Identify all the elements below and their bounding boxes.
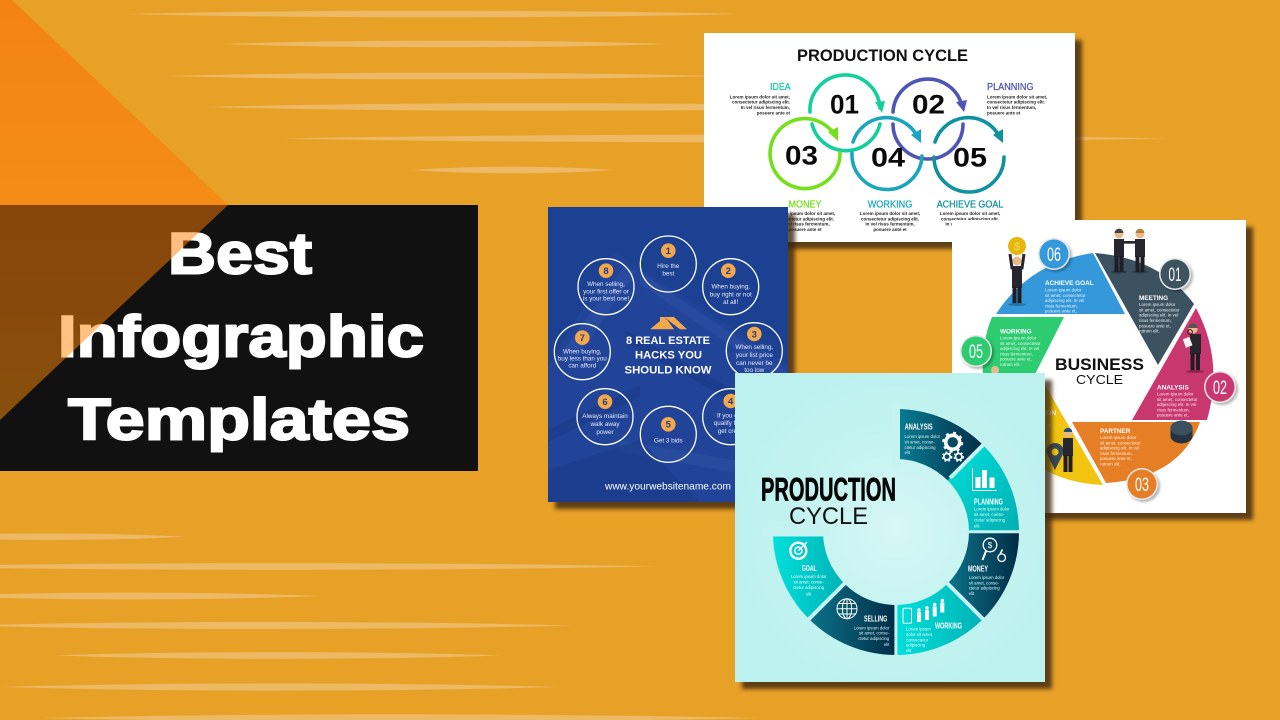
hack 7: buy less than you: [558, 356, 607, 363]
text: working: adipiscing: [906, 643, 926, 648]
centre heading: [1055, 355, 1144, 387]
donut heading: PRODUCTION: [761, 472, 896, 508]
hack 3: When selling,: [735, 344, 773, 351]
title panel: [0, 205, 478, 471]
label: money: posuere ante et: [788, 227, 822, 232]
ring numbers: 02: [912, 89, 945, 119]
hack 3: too low: [744, 367, 765, 374]
segment: meeting: Lorem ipsum dolor: [1139, 302, 1176, 307]
label: working: Lorem ipsum dolor sit amet,: [860, 211, 920, 216]
hack 2: [703, 259, 759, 315]
text: analysis: elit: [904, 450, 911, 455]
figure: partial worker: [990, 366, 1000, 379]
badge 03: 03: [1135, 475, 1149, 496]
hack 1: Hire the: [657, 263, 680, 270]
hack 7: When buying,: [563, 348, 602, 355]
hack 3: can never be: [736, 360, 773, 367]
segment: analysis: ANALYSIS: [1157, 384, 1189, 392]
text: analysis: ctetur adipiscing: [904, 445, 936, 450]
hack 8: your first offer or: [583, 288, 629, 295]
text: working: WORKING: [935, 620, 962, 630]
hack 8: When selling,: [587, 281, 625, 288]
text: goal: [791, 563, 827, 596]
segment: meeting: posuere ante et,: [1139, 323, 1171, 328]
label: money: [775, 200, 835, 232]
hack 4: 4: [728, 396, 734, 407]
panel: production cycle donut card: [735, 373, 1045, 682]
text: money: MONEY: [968, 563, 988, 573]
badge 05: [960, 335, 992, 367]
text: analysis: Lorem ipsum dolor: [904, 434, 941, 439]
text: working: [906, 620, 962, 653]
segment: meeting: adipiscing elit. In vel: [1139, 313, 1178, 318]
ring numbers: 03: [785, 140, 818, 170]
segment: analysis: [1132, 308, 1213, 420]
label: planning: posuere ante et: [987, 110, 1021, 115]
label: achieve goal: posuere ante et: [953, 227, 987, 232]
ring 01: [810, 75, 885, 151]
text: money: sit amet, conse-: [969, 580, 1000, 585]
title: Best: [168, 222, 312, 286]
label: idea: posuere ante et: [757, 110, 790, 115]
label: planning: consectetur adipiscing elit.: [987, 100, 1045, 105]
hack 1: [640, 236, 696, 292]
label: working: [860, 200, 920, 232]
icon: globe: [837, 599, 857, 619]
segment: promotion: PROMOTION: [1017, 410, 1056, 417]
hack 7: 7: [580, 333, 585, 344]
badge 01: [1159, 258, 1191, 290]
text: selling: [854, 614, 890, 647]
label: achieve goal: consectetur adipiscing elit.: [941, 216, 999, 221]
card heading: PRODUCTION CYCLE: [797, 47, 968, 65]
hack 8: 8: [603, 266, 609, 277]
label: money: consectetur adipiscing elit.: [776, 216, 834, 221]
label: idea: consectetur adipiscing elit.: [732, 100, 790, 105]
badge 01: 01: [1168, 265, 1182, 286]
hack 6: [577, 389, 633, 445]
poster heading: HACKS YOU: [635, 350, 702, 362]
text: goal: GOAL: [802, 563, 817, 573]
panel: real estate hacks poster: [548, 207, 788, 502]
label: working: consectetur adipiscing elit.: [861, 216, 919, 221]
label: planning: Lorem ipsum dolor sit amet,: [987, 94, 1047, 99]
segment: achieve goal: sit amet, consectetur: [1045, 293, 1086, 298]
ring 03: [770, 119, 840, 189]
segment: partner: risus fermentum,: [1100, 451, 1133, 456]
hack 4: [703, 389, 759, 445]
website address: www.yourwebsitename.com: [604, 480, 731, 492]
text: selling: SELLING: [864, 614, 888, 624]
label: planning: In vel risus fermentum,: [987, 105, 1036, 110]
segment: working: [983, 317, 1064, 402]
text: selling: Lorem ipsum dolor: [854, 625, 890, 630]
icon: bar chart: [972, 468, 997, 491]
segment: analysis: [896, 409, 983, 480]
badge 06: [1038, 238, 1070, 270]
hack 5: Get 3 bids: [654, 437, 683, 444]
label: working: posuere ante et: [873, 227, 907, 232]
badge 03: [1126, 468, 1158, 500]
badge 05: 05: [969, 342, 983, 363]
label: achieve goal: [937, 200, 1004, 232]
segment: planning: [948, 445, 1019, 532]
label: idea: In vel risus fermentum,: [741, 105, 790, 110]
text: planning: sit amet, conse-: [974, 512, 1005, 517]
label: achieve goal: In vel risus fermentum,: [945, 222, 995, 227]
segment: achieve goal: ACHIEVE GOAL: [1045, 280, 1094, 287]
segment: working: [896, 584, 983, 655]
title: [58, 222, 424, 452]
segment: achieve goal: risus fermentum,: [1045, 303, 1078, 308]
hack 2: at all!: [723, 299, 738, 306]
segment: analysis: posuere ante et,: [1157, 413, 1189, 418]
segment: working: Lorem ipsum dolor: [1000, 336, 1037, 340]
text: working: dolor sit amet,: [906, 632, 933, 637]
ring 05: [934, 118, 1004, 192]
text: goal: ctetur adipiscing: [793, 585, 825, 590]
segment: partner: [1072, 422, 1200, 483]
segment: analysis: risus fermentum,: [1157, 407, 1190, 412]
figure: man with coin: $: [1014, 241, 1020, 253]
label: money: MONEY: [788, 200, 822, 211]
donut heading: [761, 472, 896, 530]
label: planning: [987, 82, 1047, 115]
segment: achieve goal: [996, 253, 1125, 314]
segment: working: WORKING: [1000, 328, 1032, 336]
segment: promotion: risus fermentum,: [1010, 433, 1043, 438]
text: planning: Lorem ipsum dolor: [974, 507, 1010, 512]
text: analysis: ANALYSIS: [905, 421, 933, 431]
text: money: Lorem ipsum dolor: [969, 575, 1005, 580]
ring 02: [893, 79, 967, 159]
text: working: Lorem ipsum: [906, 627, 931, 632]
figure: man with pin: [1046, 428, 1073, 472]
icon: roof: [650, 317, 687, 329]
ring numbers: 04: [871, 143, 905, 173]
label: working: In vel risus fermentum,: [865, 222, 915, 227]
segment: partner: rutrum elit.: [1100, 462, 1121, 466]
poster heading: SHOULD KNOW: [624, 364, 712, 376]
segment: promotion: sit amet, consectetur: [1010, 422, 1051, 427]
hack 8: [578, 259, 634, 315]
hack 2: 2: [726, 266, 731, 277]
ring 04: [852, 118, 922, 190]
hack 6: Always maintain: [582, 413, 628, 420]
text: selling: elit: [884, 642, 890, 647]
hack 1: best: [662, 271, 674, 278]
building photo overlay: [548, 252, 788, 502]
segment: achieve goal: posuere ante et,: [1045, 309, 1077, 314]
segment: partner: sit amet, consectetur: [1100, 440, 1141, 445]
ring numbers: 05: [953, 143, 987, 173]
label: planning: PLANNING: [987, 82, 1034, 93]
text: selling: ctetur adipiscing: [858, 636, 890, 641]
text: working: consectetur: [906, 637, 929, 642]
ring numbers: [785, 89, 987, 173]
badge 06: 06: [1047, 245, 1061, 266]
text: goal: elit: [806, 591, 812, 596]
hack 7: [554, 324, 610, 380]
label: idea: Lorem ipsum dolor sit amet,: [730, 94, 790, 99]
label: money: In vel risus fermentum,: [780, 222, 830, 227]
icon: gears: [942, 433, 963, 461]
icon: magnifier dollar: $: [988, 541, 993, 550]
text: planning: PLANNING: [974, 496, 1003, 506]
panel: production cycle rings card: [704, 33, 1075, 242]
text: money: elit: [969, 591, 975, 596]
label: working: WORKING: [868, 200, 912, 211]
text: planning: ctetur adipiscing: [974, 518, 1006, 523]
centre heading: BUSINESS: [1055, 355, 1144, 374]
segment: meeting: MEETING: [1139, 295, 1168, 302]
segment: working: sit amet, consectetur: [1000, 341, 1041, 346]
segment: working: risus fermentum,: [1000, 351, 1033, 356]
orange triangle overlay: [0, 0, 228, 420]
segment: working: rutrum elit.: [1000, 362, 1021, 367]
segment: meeting: rutrum elit.: [1139, 329, 1160, 334]
hack 5: [640, 406, 696, 462]
badge 02: [1204, 371, 1236, 403]
segment: money: [948, 532, 1019, 619]
hack 3: [726, 323, 782, 379]
hack 6: walk away: [589, 421, 620, 428]
label: idea: [730, 82, 791, 115]
segment: analysis: sit amet, consectetur: [1157, 397, 1198, 402]
hack 8: is your best one!: [583, 296, 629, 303]
text: money: [968, 563, 1005, 596]
segment: achieve goal: Lorem ipsum dolor: [1045, 288, 1082, 292]
figure: man with coin: [1008, 237, 1026, 306]
segment: working: adipiscing elit. In vel: [1000, 346, 1039, 351]
donut heading: CYCLE: [789, 503, 868, 530]
text: analysis: [904, 421, 941, 455]
text: planning: elit: [974, 523, 980, 528]
text: goal: Lorem ipsum dolor: [791, 574, 827, 579]
hack 5: 5: [666, 420, 672, 431]
label: idea: IDEA: [770, 82, 791, 93]
title: Templates: [68, 388, 410, 452]
segment: partner: posuere ante et,: [1100, 456, 1132, 461]
label: achieve goal: ACHIEVE GOAL: [937, 200, 1004, 211]
figure: analyst: [1183, 323, 1204, 373]
title: Infographic: [58, 304, 424, 370]
text: analysis: sit amet, conse-: [904, 440, 935, 444]
poster heading: 8 REAL ESTATE: [626, 335, 710, 347]
hack 3: 3: [752, 329, 757, 340]
badge 02: 02: [1213, 378, 1227, 399]
text: working: elit: [906, 648, 912, 653]
segment: partner: Lorem ipsum dolor: [1100, 435, 1137, 440]
hack 1: 1: [666, 246, 672, 257]
segment: goal: [773, 532, 844, 619]
icon: storage cylinder: [1170, 420, 1192, 444]
hack 6: power: [596, 429, 614, 436]
segment: meeting: [1095, 253, 1194, 365]
ring numbers: 01: [830, 89, 859, 119]
segment: working: posuere ante et,: [1000, 357, 1032, 362]
segment: meeting: sit amet, consectetur: [1139, 307, 1180, 312]
hack 6: 6: [602, 397, 608, 408]
hack 4: If you can: [717, 413, 745, 420]
icon: phone and people: [903, 599, 944, 623]
text: goal: sit amet, conse-: [794, 579, 824, 584]
hack 3: your list price: [736, 352, 773, 359]
poster heading: [624, 335, 712, 376]
segment: partner: PARTNER: [1100, 428, 1131, 435]
panel: business cycle card: [952, 220, 1246, 513]
hack 7: can afford: [568, 363, 597, 370]
segment: selling: [809, 584, 896, 655]
segment: analysis: adipiscing elit. In vel: [1157, 402, 1196, 407]
hack 2: When buying,: [711, 284, 750, 291]
hack 2: buy right or not: [710, 292, 752, 299]
centre heading: CYCLE: [1076, 372, 1123, 387]
segment: meeting: risus fermentum,: [1139, 318, 1172, 323]
hack 4: get credit: [718, 428, 744, 435]
segment: promotion: Lorem ipsum dolor: [1010, 417, 1047, 422]
text: selling: sit amet, conse-: [859, 631, 890, 636]
icon: target: [790, 542, 807, 559]
segment: analysis: Lorem ipsum dolor: [1157, 392, 1194, 396]
icon: magnifier dollar: [982, 538, 1006, 562]
figures: handshake: [1111, 229, 1148, 274]
text: planning: [974, 496, 1010, 528]
hack 4: qualify for it,: [714, 420, 748, 427]
segment: achieve goal: adipiscing elit. In vel: [1045, 298, 1084, 303]
segment: promotion: adipiscing elit. In vel: [1010, 428, 1049, 433]
label: achieve goal: Lorem ipsum dolor sit amet,: [940, 211, 1000, 216]
label: money: Lorem ipsum dolor sit amet,: [775, 211, 835, 216]
segment: promotion: [1010, 385, 1103, 485]
segment: partner: adipiscing elit. In vel: [1100, 446, 1139, 451]
text: money: ctetur adipiscing: [969, 586, 1000, 591]
